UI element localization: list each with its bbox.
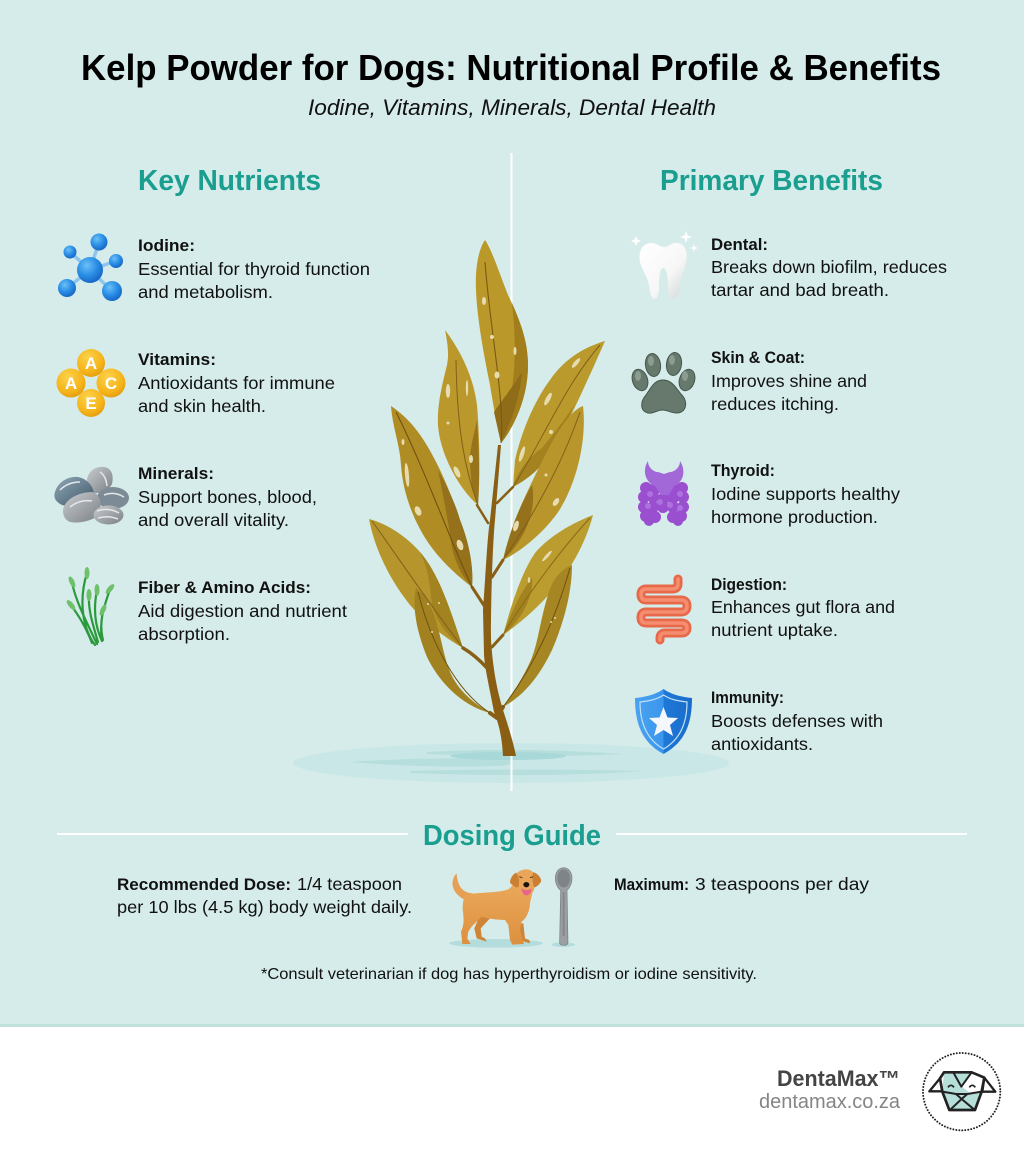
footer brand text: dentamax.co.za — [759, 1091, 901, 1113]
text: skin and coat — [711, 349, 867, 414]
footer brand text: DentaMax™ — [777, 1066, 900, 1091]
text: immunity: antioxidants. — [711, 734, 813, 754]
text: fiber — [138, 579, 347, 644]
icon: digestion — [641, 579, 687, 640]
icon: spoon — [552, 868, 575, 947]
leaf 6: lower right narrow — [503, 565, 572, 707]
leaf 5: lower right — [503, 515, 593, 635]
illustration: kelp plant — [369, 240, 605, 756]
water ripple — [293, 743, 729, 783]
footer brand text — [759, 1066, 901, 1113]
leaf 9: top — [476, 240, 528, 443]
text: vitamins: Antioxidants for immune — [138, 373, 335, 393]
icon: fiber — [65, 567, 116, 645]
text: thyroid: Thyroid: — [711, 462, 775, 480]
text: iodine — [138, 237, 370, 302]
center divider — [510, 153, 512, 791]
heading: key nutrients: Key Nutrients — [138, 165, 321, 197]
icon: iodine molecule — [58, 234, 123, 301]
text: immunity: Immunity: — [711, 689, 784, 707]
dosing guide divider lines — [57, 833, 967, 835]
subtitle: Iodine, Vitamins, Minerals, Dental Health — [308, 95, 716, 120]
text: immunity — [711, 689, 883, 754]
text: vitamins — [138, 351, 335, 416]
text: thyroid: Iodine supports healthy — [711, 484, 900, 504]
text: iodine: and metabolism. — [138, 282, 273, 302]
text: skin and coat: reduces itching. — [711, 394, 839, 414]
text: recommended dose — [117, 874, 412, 917]
icon: vitamins — [56, 349, 126, 417]
text: fiber: Aid digestion and nutrient — [138, 601, 347, 621]
icon: immunity shield — [635, 689, 692, 754]
icon: thyroid — [638, 461, 689, 526]
text: skin and coat: Skin & Coat: — [711, 349, 805, 367]
text: fiber: Fiber & Amino Acids: — [138, 579, 311, 597]
text: dental: Dental: — [711, 236, 768, 254]
icon: paw — [629, 352, 698, 413]
text: iodine: Essential for thyroid function — [138, 259, 370, 279]
text: thyroid — [711, 462, 900, 527]
leaf 2: lower left narrow — [414, 588, 490, 713]
stem — [483, 445, 516, 756]
branches — [463, 487, 513, 718]
text: dental — [711, 236, 947, 300]
text: immunity: Boosts defenses with — [711, 711, 883, 731]
leaf 4: upper left inner — [438, 330, 479, 505]
text: recommended dose: per 10 lbs (4.5 kg) body weight daily. — [117, 897, 412, 917]
icon: minerals — [54, 467, 129, 524]
icon: vitamins: A — [85, 354, 97, 373]
title: Kelp Powder for Dogs: Nutritional Profile & Benefits — [81, 47, 941, 88]
text: vitamins: and skin health. — [138, 396, 266, 416]
leaf 1: lower left — [369, 519, 463, 648]
text: digestion: Enhances gut flora and — [711, 597, 895, 617]
text: minerals: Support bones, blood, — [138, 487, 317, 507]
icon: vitamins: E — [85, 394, 97, 413]
icon: vitamins: C — [105, 374, 117, 393]
text: maximum — [614, 874, 869, 894]
text: skin and coat: Improves shine and — [711, 371, 867, 391]
text: dental: tartar and bad breath. — [711, 280, 889, 300]
text: minerals: Minerals: — [138, 465, 214, 483]
text: recommended dose: 1/4 teaspoon — [297, 874, 402, 894]
icon: tooth — [631, 231, 698, 299]
heading: primary benefits: Primary Benefits — [660, 165, 883, 197]
text: iodine: Iodine: — [138, 237, 195, 255]
icon: vitamins: A — [65, 374, 77, 393]
leaf 8: second right — [503, 406, 584, 560]
note: veterinarian caution: *Consult veterinarian if dog has hyperthyroidism or iodine sensitivity. — [261, 966, 757, 983]
heading: dosing guide: Dosing Guide — [423, 820, 601, 852]
text: maximum: Maximum: — [614, 876, 689, 894]
leaf 7: upper right — [513, 341, 605, 487]
text: dental: Breaks down biofilm, reduces — [711, 257, 947, 277]
logo: dog badge — [923, 1053, 1000, 1130]
text: vitamins: Vitamins: — [138, 351, 216, 369]
text: minerals — [138, 465, 317, 530]
text: recommended dose: Recommended Dose: — [117, 876, 291, 894]
icon: dog — [449, 869, 543, 948]
text: maximum: 3 teaspoons per day — [695, 874, 869, 894]
text: digestion: nutrient uptake. — [711, 620, 838, 640]
leaf spots — [402, 297, 581, 633]
text: digestion — [711, 576, 895, 640]
text: minerals: and overall vitality. — [138, 510, 289, 530]
text: digestion: Digestion: — [711, 576, 787, 594]
text: thyroid: hormone production. — [711, 507, 878, 527]
text: fiber: absorption. — [138, 624, 230, 644]
leaf 3: upper left big — [391, 406, 472, 587]
